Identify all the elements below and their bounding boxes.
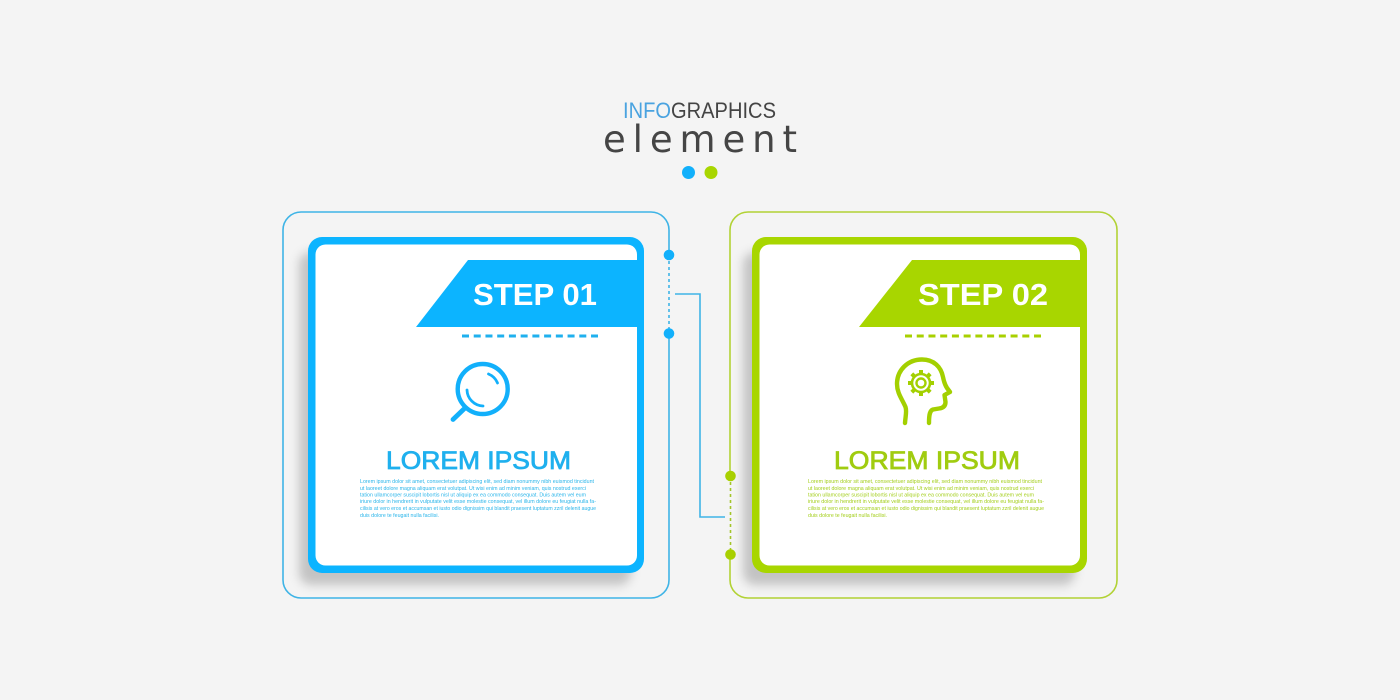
icon: magnifying glass	[453, 364, 508, 420]
step 01 body text: duis dolore te feugait nulla facilisi.	[360, 513, 439, 519]
step 02 body text: tation ullamcorper suscipit lobortis nisl ut aliquip ex ea commodo consequat. Duis autem vel eum	[808, 492, 1034, 498]
step 01 heading: LOREM IPSUM	[386, 447, 571, 475]
step 01 body text: Lorem ipsum dolor sit amet, consectetuer adipiscing elit, sed diam nonummy nibh euismod tincidunt	[360, 479, 594, 485]
step 02 body text: iriure dolor in hendrerit in vulputate velit esse molestie consequat, vel illum dolore eu feugiat nulla fa-	[808, 499, 1044, 505]
icon: head with gear	[897, 360, 950, 423]
step 02 body text: duis dolore te feugait nulla facilisi.	[808, 513, 887, 519]
step 02 body text: Lorem ipsum dolor sit amet, consectetuer adipiscing elit, sed diam nonummy nibh euismod tincidunt	[808, 479, 1042, 485]
step 01 body text: ut laoreet dolore magna aliquam erat volutpat. Ut wisi enim ad minim veniam, quis nostrud exerci	[360, 486, 586, 492]
title line: element: element	[603, 118, 797, 161]
blue dashed divider	[462, 334, 598, 338]
step 01 label: STEP 01	[473, 277, 597, 312]
blue frame nodes	[664, 250, 674, 339]
green card	[752, 237, 1087, 573]
step 02 body text	[808, 479, 1044, 519]
title	[603, 98, 797, 161]
step 01 body text	[360, 479, 596, 519]
connector line between steps	[675, 294, 725, 517]
step 02 body text: cilisis at vero eros et accumsan et iusto odio dignissim qui blandit praesent luptatum zzril delenit augue	[808, 506, 1044, 512]
green dashed divider	[905, 334, 1041, 338]
step 02 heading: LOREM IPSUM	[834, 447, 1020, 475]
green outer frame	[730, 212, 1117, 598]
step 01 body text: cilisis at vero eros et accumsan et iusto odio dignissim qui blandit praesent luptatum zzril delenit augue	[360, 506, 596, 512]
green card shadow	[743, 252, 1075, 585]
step 01 body text: iriure dolor in hendrerit in vulputate velit esse molestie consequat, vel illum dolore eu feugiat nulla fa-	[360, 499, 596, 505]
step 01 banner	[416, 260, 644, 327]
title accent dots	[682, 166, 718, 179]
panel: step 02	[725, 212, 1117, 598]
green frame nodes	[725, 471, 736, 560]
title line: infographics: INFOGRAPHICS	[623, 98, 776, 123]
step 02 body text: ut laoreet dolore magna aliquam erat volutpat. Ut wisi enim ad minim veniam, quis nostrud exerci	[808, 486, 1034, 492]
step 02 banner	[859, 260, 1087, 327]
blue card	[308, 237, 644, 573]
step 01 body text: tation ullamcorper suscipit lobortis nisl ut aliquip ex ea commodo consequat. Duis autem vel eum	[360, 492, 586, 498]
panel: step 01	[283, 212, 674, 598]
blue card shadow	[299, 252, 631, 585]
step 02 label: STEP 02	[918, 277, 1048, 312]
blue outer frame	[283, 212, 669, 598]
